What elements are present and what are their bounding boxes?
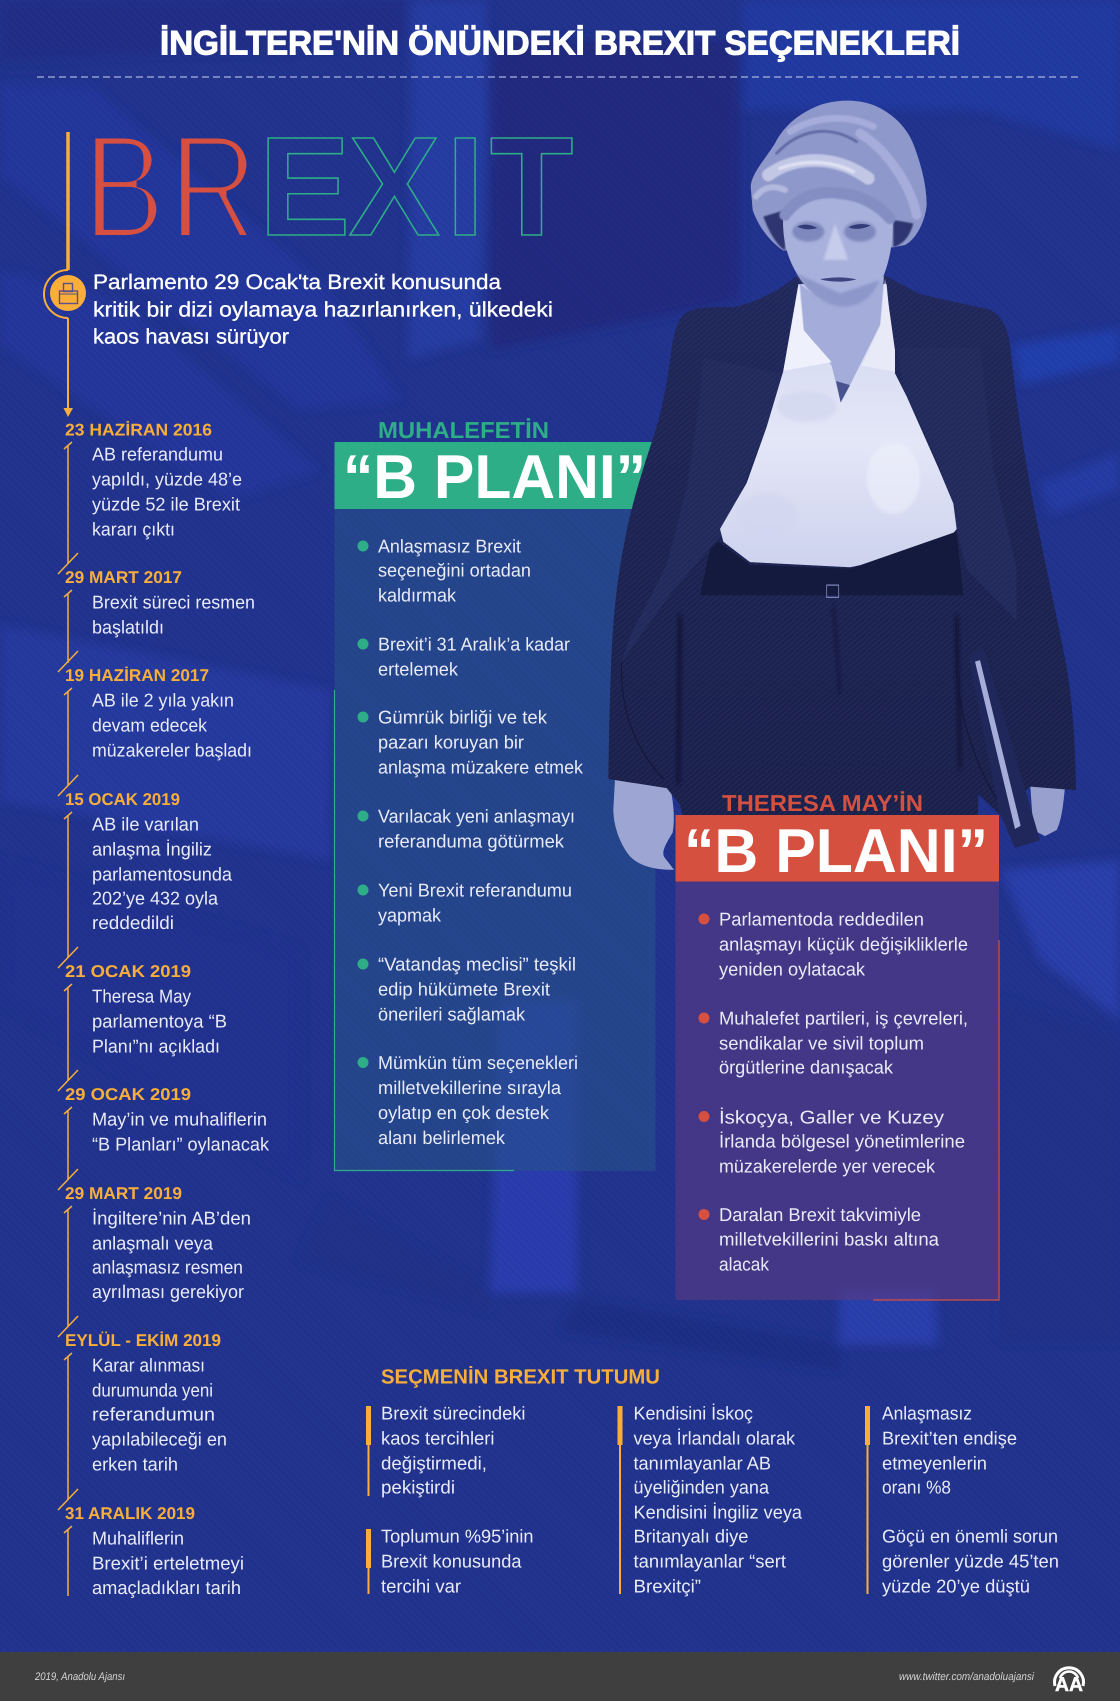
- intro text: [93, 271, 553, 348]
- event: 23 Haziran 2016: kararı çıktı: [92, 518, 175, 540]
- green list: edip hükümete Brexit: [378, 978, 550, 1000]
- event: Eylül - Ekim 2019: yapılabileceği en: [92, 1428, 227, 1450]
- red list: İrlanda bölgesel yönetimlerine: [719, 1130, 965, 1152]
- waist and belt: [700, 532, 963, 595]
- timeline connectors: [58, 442, 78, 1596]
- green list: yapmak: [378, 904, 442, 926]
- event: 29 Ocak 2019: May’in ve muhaliflerin: [92, 1108, 267, 1130]
- column 1: Brexit sürecindeki: [381, 1402, 526, 1424]
- jacket: [608, 276, 1076, 820]
- shirt shading: [737, 391, 920, 534]
- event: 29 Mart 2017: [65, 568, 255, 638]
- column 3: [865, 1402, 1059, 1596]
- event: 21 Ocak 2019: 21 OCAK 2019: [65, 962, 191, 981]
- red list: müzakerelerde yer verecek: [719, 1156, 936, 1176]
- red list: Parlamentoda reddedilen: [719, 908, 924, 930]
- shirt: [720, 284, 957, 567]
- red list: örgütlerine danışacak: [719, 1056, 894, 1078]
- column 1: değiştirmedi,: [381, 1452, 487, 1474]
- red list: alacak: [719, 1254, 770, 1274]
- right hand: [1030, 782, 1065, 836]
- event: Eylül - Ekim 2019: referandumun: [92, 1404, 215, 1424]
- green list: Varılacak yeni anlaşmayı: [378, 806, 575, 826]
- red list: Daralan Brexit takvimiyle: [719, 1204, 921, 1225]
- event: 31 Aralık 2019: 31 ARALIK 2019: [65, 1504, 195, 1523]
- column 2: tanımlayanlar “sert: [634, 1550, 786, 1572]
- column 2: Kendisini İngiliz veya: [634, 1502, 803, 1522]
- event: 29 Ocak 2019: [65, 1085, 270, 1154]
- column 2: Brexitçi”: [634, 1576, 701, 1596]
- red list: sendikalar ve sivil toplum: [719, 1032, 924, 1054]
- green list: referanduma götürmek: [378, 830, 565, 852]
- left hand: [613, 777, 674, 870]
- event: 15 Ocak 2019: reddedildi: [92, 912, 174, 933]
- face shadows: [792, 222, 880, 307]
- red list: yeniden oylatacak: [719, 958, 866, 980]
- green list: önerileri sağlamak: [378, 1004, 526, 1024]
- green list: seçeneğini ortadan: [378, 560, 531, 580]
- event: 19 Haziran 2017: [65, 666, 252, 760]
- title divider: [37, 76, 1081, 78]
- folder: [968, 646, 1040, 848]
- mouth: [820, 277, 857, 282]
- event: Eylül - Ekim 2019: erken tarih: [92, 1454, 178, 1474]
- column 2: tanımlayanlar AB: [634, 1452, 771, 1474]
- event: 23 Haziran 2016: [65, 420, 242, 540]
- event: 21 Ocak 2019: parlamentoya “B: [92, 1010, 227, 1032]
- red panel border: [873, 940, 999, 1300]
- source url: www.twitter.com/anadoluajansi: [899, 1671, 1034, 1683]
- column 2: Britanyalı diye: [634, 1526, 748, 1546]
- green list: milletvekillerine sırayla: [378, 1077, 562, 1098]
- red panel background: [676, 881, 999, 1300]
- column 1: Toplumun %95’inin: [381, 1526, 534, 1546]
- event: 31 Aralık 2019: [65, 1504, 244, 1598]
- EXIT, green outlined lettering: EXIT: [259, 107, 573, 265]
- red list: milletvekillerini baskı altına: [719, 1228, 940, 1250]
- green list: Gümrük birliği ve tek: [378, 706, 548, 728]
- green list: [358, 536, 584, 1148]
- main timeline arrow with ballot icon: [44, 132, 86, 417]
- event: 29 Ocak 2019: 29 OCAK 2019: [65, 1085, 191, 1104]
- event: 23 Haziran 2016: yapıldı, yüzde 48’e: [92, 468, 242, 490]
- event: 29 Mart 2019: 29 MART 2019: [65, 1184, 182, 1203]
- green panel border: [334, 690, 514, 1170]
- event: 29 Mart 2017: Brexit süreci resmen: [92, 592, 255, 612]
- column 1: Brexit konusunda: [381, 1550, 522, 1572]
- neck and chest: [800, 276, 884, 402]
- event: Eylül - Ekim 2019: Karar alınması: [92, 1354, 205, 1376]
- timeline: [58, 420, 270, 1598]
- column 3: oranı %8: [882, 1476, 951, 1498]
- column 2: Kendisini İskoç: [634, 1402, 753, 1424]
- intro text: kaos havası sürüyor: [93, 326, 289, 348]
- column 2: veya İrlandalı olarak: [634, 1428, 796, 1448]
- red list: [698, 908, 968, 1274]
- green list: alanı belirlemek: [378, 1127, 506, 1148]
- event: Eylül - Ekim 2019: EYLÜL - EKİM 2019: [65, 1331, 221, 1350]
- column 2: [618, 1402, 803, 1596]
- credit: 2019, Anadolu Ajansı: [34, 1671, 125, 1683]
- event: 31 Aralık 2019: amaçladıkları tarih: [92, 1577, 241, 1598]
- column 3: Göçü en önemli sorun: [882, 1526, 1058, 1546]
- green list: anlaşma müzakere etmek: [378, 756, 584, 778]
- event: 15 Ocak 2019: parlamentosunda: [92, 864, 233, 884]
- column 3: Brexit’ten endişe: [882, 1428, 1017, 1448]
- green panel background: [334, 509, 656, 1171]
- green heading label: MUHALEFETİN: [378, 417, 549, 443]
- event: 15 Ocak 2019: 202’ye 432 oyla: [92, 888, 219, 908]
- panel: opposition B plan: [334, 417, 656, 1171]
- jacket weave texture: [608, 276, 1076, 820]
- green list: kaldırmak: [378, 584, 457, 606]
- event: 23 Haziran 2016: yüzde 52 ile Brexit: [92, 494, 240, 514]
- intro text: kritik bir dizi oylamaya hazırlanırken, ülkedeki: [93, 298, 553, 322]
- red list: Muhalefet partileri, iş çevreleri,: [719, 1008, 968, 1028]
- event: 29 Mart 2019: anlaşmasız resmen: [92, 1256, 243, 1278]
- red heading label: THERESA MAY’İN: [722, 790, 923, 816]
- event: 29 Mart 2017: başlatıldı: [92, 616, 164, 638]
- event: 19 Haziran 2017: AB ile 2 yıla yakın: [92, 690, 234, 710]
- event: 19 Haziran 2017: devam edecek: [92, 714, 208, 736]
- title: İNGİLTERE'NİN ÖNÜNDEKİ BREXIT SEÇENEKLERİ: [160, 24, 960, 62]
- body: jacket, shirt, skirt, hands, folder: [608, 276, 1076, 870]
- event: 15 Ocak 2019: 15 OCAK 2019: [65, 790, 180, 809]
- green list: ertelemek: [378, 658, 459, 680]
- portrait: Theresa May duotone illustration: [608, 101, 1076, 870]
- hair strands: [756, 118, 917, 218]
- event: 29 Mart 2019: İngiltere’nin AB’den: [92, 1208, 251, 1228]
- face: [783, 190, 893, 307]
- green heading banner: “B PLANI”: [343, 443, 646, 512]
- event: 19 Haziran 2017: 19 HAZİRAN 2017: [65, 666, 209, 685]
- event: 29 Mart 2017: 29 MART 2017: [65, 568, 182, 587]
- event: 23 Haziran 2016: 23 HAZİRAN 2016: [65, 420, 212, 440]
- event: 29 Mart 2019: anlaşmalı veya: [92, 1232, 214, 1254]
- hair mass: [751, 101, 927, 251]
- icon: Anadolu Agency logo: AA: [1055, 1674, 1083, 1696]
- column 1: pekiştirdi: [381, 1476, 455, 1498]
- green list: pazarı koruyan bir: [378, 732, 524, 752]
- section heading: SEÇMENİN BREXIT TUTUMU: [381, 1366, 660, 1388]
- event: 21 Ocak 2019: [65, 962, 227, 1056]
- section: voter attitude: [366, 1366, 1059, 1596]
- column 3: yüzde 20’ye düştü: [882, 1576, 1030, 1596]
- green list: Yeni Brexit referandumu: [378, 880, 572, 900]
- skirt shading: [678, 606, 960, 784]
- column 1: [366, 1402, 534, 1596]
- green list: Mümkün tüm seçenekleri: [378, 1052, 578, 1073]
- big word BREXIT: [84, 103, 573, 270]
- event: 23 Haziran 2016: AB referandumu: [92, 444, 223, 464]
- event: 29 Mart 2019: ayrılması gerekiyor: [92, 1281, 244, 1302]
- icon: ballot box: [50, 275, 86, 311]
- column 1: kaos tercihleri: [381, 1428, 494, 1448]
- collar: [783, 284, 832, 371]
- event: Eylül - Ekim 2019: [65, 1331, 227, 1474]
- event: 19 Haziran 2017: müzakereler başladı: [92, 740, 252, 760]
- hair side shadows: [763, 210, 913, 251]
- event: 29 Mart 2019: [65, 1184, 251, 1302]
- event: 21 Ocak 2019: Planı”nı açıkladı: [92, 1036, 220, 1056]
- footer: [0, 1652, 1120, 1701]
- event: Eylül - Ekim 2019: durumunda yeni: [92, 1380, 213, 1400]
- event: 15 Ocak 2019: anlaşma İngiliz: [92, 838, 212, 860]
- event: 31 Aralık 2019: Brexit’i erteletmeyi: [92, 1552, 244, 1574]
- green list: Anlaşmasız Brexit: [378, 536, 521, 556]
- column 1: tercihi var: [381, 1576, 461, 1596]
- head: hair and face: [751, 101, 927, 307]
- event: 15 Ocak 2019: [65, 790, 233, 933]
- column 2: üyeliğinden yana: [634, 1476, 770, 1498]
- event: 15 Ocak 2019: AB ile varılan: [92, 814, 199, 834]
- red list: anlaşmayı küçük değişikliklerle: [719, 934, 968, 954]
- lapels: [622, 358, 782, 662]
- column 3: Anlaşmasız: [882, 1402, 972, 1424]
- eyes: [797, 224, 871, 229]
- column 3: etmeyenlerin: [882, 1452, 987, 1474]
- event: 21 Ocak 2019: Theresa May: [92, 986, 192, 1006]
- panel: Theresa May B plan: [676, 790, 999, 1300]
- green list: oylatıp en çok destek: [378, 1102, 550, 1123]
- jacket seams: [621, 636, 997, 799]
- green list: “Vatandaş meclisi” teşkil: [378, 954, 576, 974]
- event: 29 Ocak 2019: “B Planları” oylanacak: [92, 1134, 270, 1154]
- green list: Brexit’i 31 Aralık’a kadar: [378, 634, 570, 654]
- red list: İskoçya, Galler ve Kuzey: [719, 1106, 945, 1128]
- red heading banner: “B PLANI”: [684, 817, 988, 886]
- event: 31 Aralık 2019: Muhaliflerin: [92, 1528, 184, 1548]
- column 3: görenler yüzde 45’ten: [882, 1550, 1059, 1572]
- BR, red light lettering: BR: [84, 103, 257, 270]
- intro text: Parlamento 29 Ocak'ta Brexit konusunda: [93, 271, 501, 294]
